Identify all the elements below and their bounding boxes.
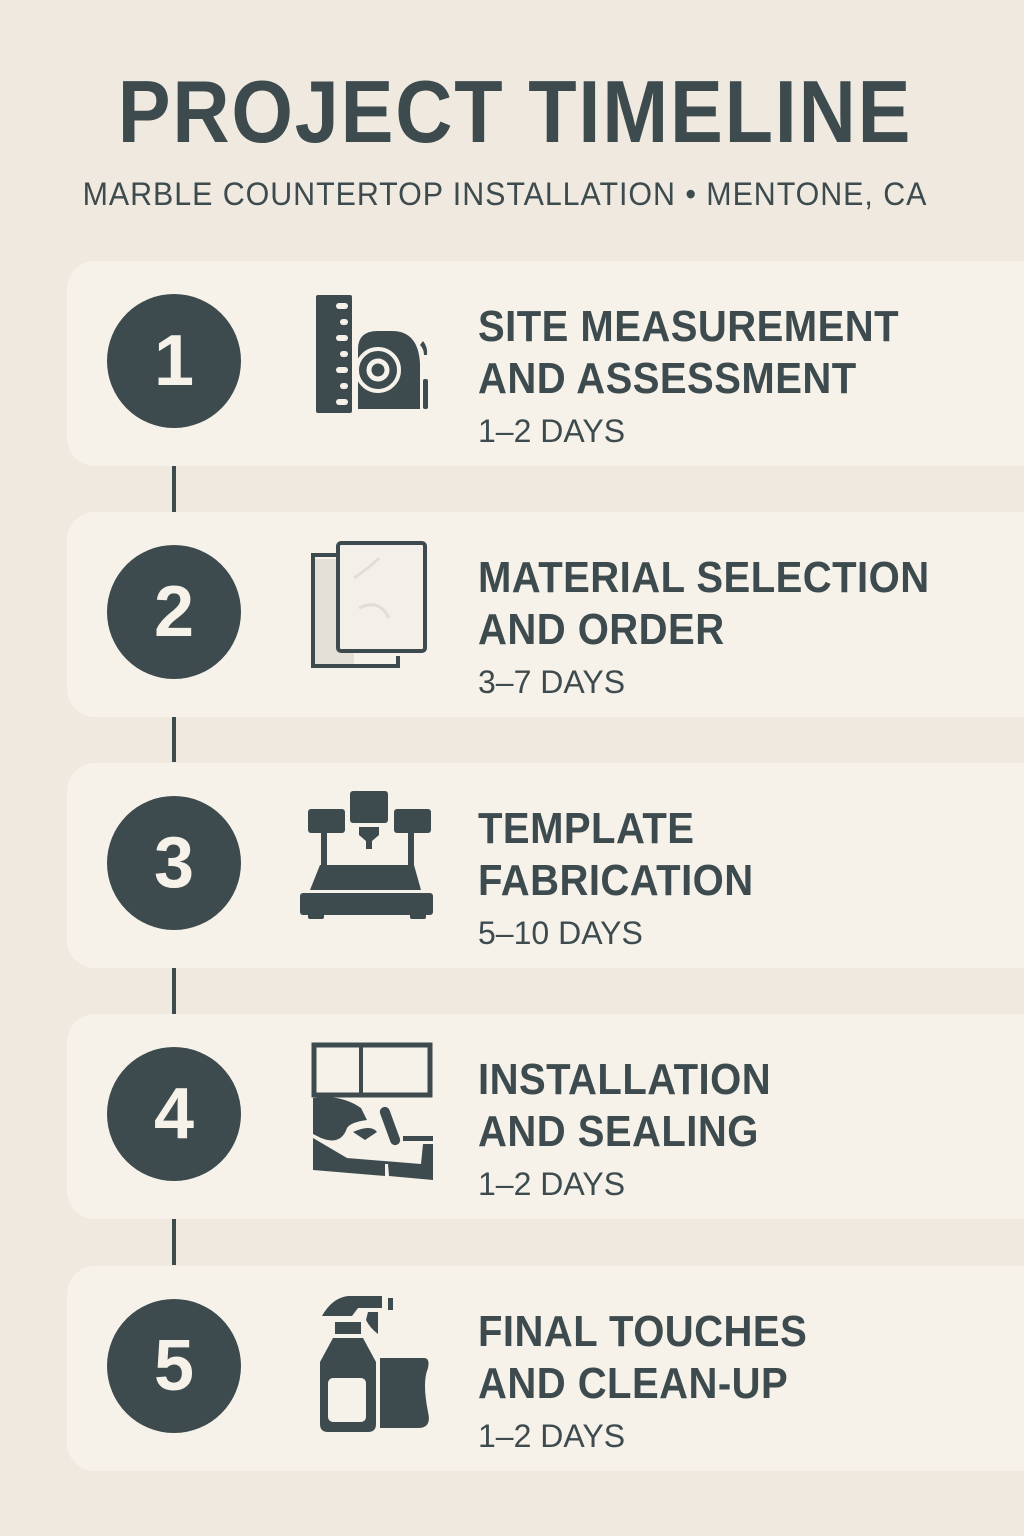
step 2 text: MATERIAL SELECTION	[478, 553, 930, 602]
step 5 text: AND CLEAN-UP	[478, 1359, 788, 1408]
step 3 text	[478, 804, 754, 951]
step 1 text: AND ASSESSMENT	[478, 354, 857, 403]
panel: step 3	[67, 763, 1024, 968]
step 4 text: AND SEALING	[478, 1107, 759, 1156]
step 5 text	[478, 1307, 807, 1454]
step number 1: 1	[154, 321, 194, 401]
step 3 text: FABRICATION	[478, 856, 754, 905]
icon: fabrication machine	[300, 791, 433, 919]
step number 5: 5	[154, 1326, 194, 1406]
step number 4	[107, 1047, 241, 1181]
step 3 text: TEMPLATE	[478, 804, 694, 853]
step 5 text: FINAL TOUCHES	[478, 1307, 807, 1356]
step 4 text	[478, 1055, 771, 1202]
step 4 text: INSTALLATION	[478, 1055, 771, 1104]
panel: step 1	[67, 261, 1024, 466]
step 3 text: 5–10 DAYS	[478, 915, 643, 951]
connector lines	[109, 466, 400, 1265]
step 1 text: SITE MEASUREMENT	[478, 302, 899, 351]
step number 1	[107, 294, 241, 428]
step number 2	[107, 545, 241, 679]
step 2 text: 3–7 DAYS	[478, 664, 625, 700]
panel: step 2	[67, 512, 1024, 717]
icon: spray bottle and sponge	[320, 1296, 429, 1432]
step number 5	[107, 1299, 241, 1433]
step number 4: 4	[154, 1074, 194, 1154]
icon: installation hand	[312, 1042, 433, 1180]
step number 3	[107, 796, 241, 930]
panel: step 5	[67, 1266, 1024, 1471]
step 2 text: AND ORDER	[478, 605, 725, 654]
step number 2: 2	[154, 572, 194, 652]
icon: ruler and tape measure	[316, 295, 428, 413]
step 1 text: 1–2 DAYS	[478, 413, 625, 449]
step 1 text	[478, 302, 899, 449]
panel: step 4	[67, 1014, 1024, 1219]
step 4 text: 1–2 DAYS	[478, 1166, 625, 1202]
step number 3: 3	[154, 823, 194, 903]
step 2 text	[478, 553, 930, 700]
title: PROJECT TIMELINE	[118, 62, 912, 161]
subtitle: MARBLE COUNTERTOP INSTALLATION • MENTONE, CA	[83, 176, 927, 212]
icon: marble slabs	[311, 541, 427, 668]
step 5 text: 1–2 DAYS	[478, 1418, 625, 1454]
